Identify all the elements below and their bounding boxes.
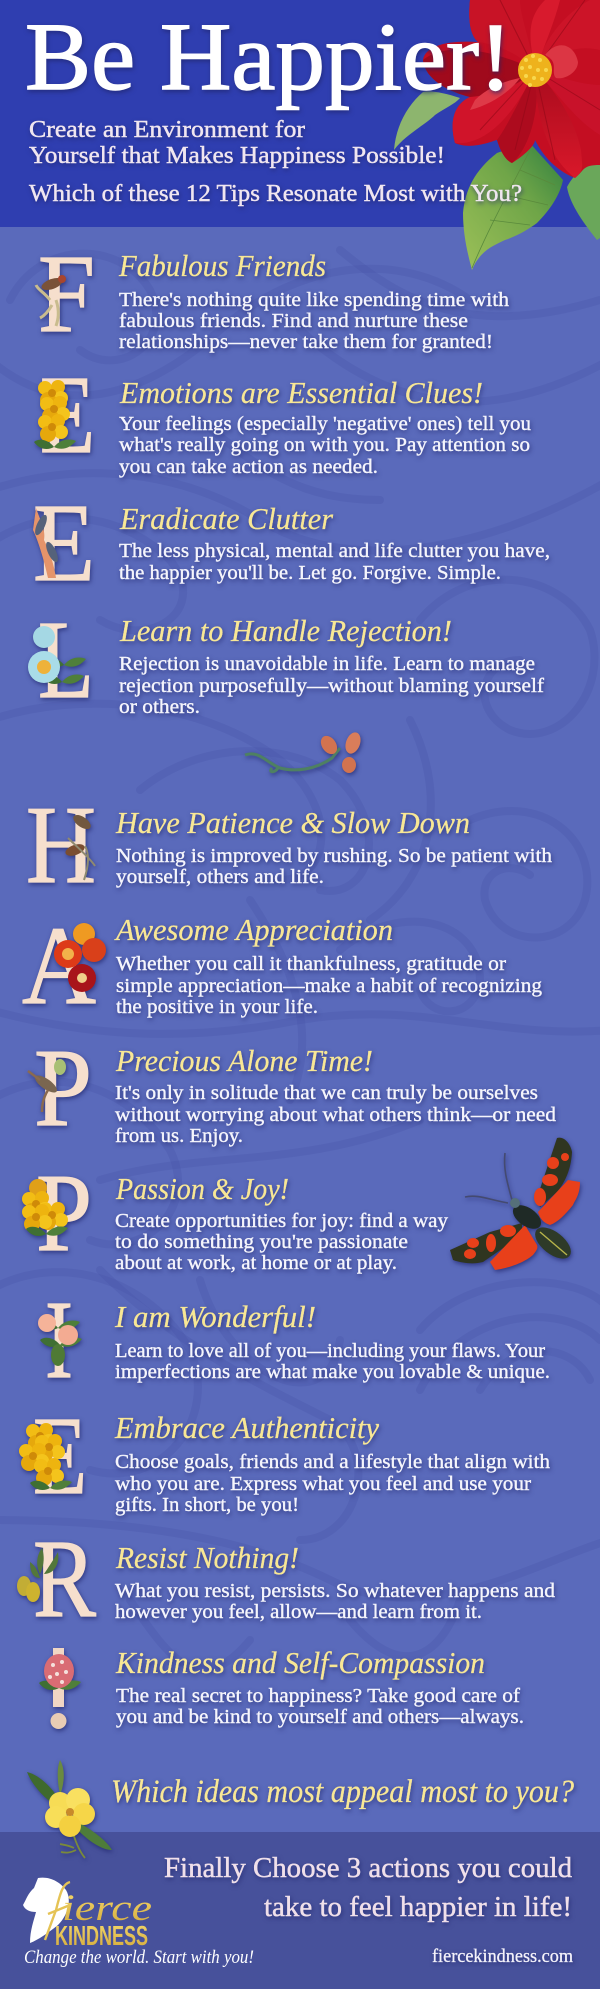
body text: you can take action as needed. [119,456,378,478]
head [510,1198,520,1208]
letter E: E [40,354,95,477]
body text: Learn to love all of you—including your flaws. Your [115,1340,545,1362]
lion head icon [23,1878,69,1943]
abdomen [530,1221,576,1265]
body text [119,289,509,353]
body text [116,845,552,888]
subtitle: Create an Environment for [29,117,305,143]
subtitle: Which of these 12 Tips Resonate Most with You? [29,181,522,207]
subtitle [29,117,522,207]
body text: What you resist, persists. So whatever happens and [115,1580,555,1602]
body text: imperfections are what make you lovable & unique. [115,1361,550,1383]
tip: I am Wonderful! [38,1279,550,1402]
body text [115,1580,555,1623]
panel: footer background [0,1832,600,1989]
title: Be Happier! [25,3,512,110]
heading: Emotions are Essential Clues! [119,375,483,410]
tip: Kindness and Self-Compassion [39,1645,524,1729]
tip: Emotions are Essential Clues! [34,354,531,478]
heading: Kindness and Self-Compassion [115,1645,485,1680]
tip: Precious Alone Time! [28,1027,556,1150]
website url: fiercekindness.com [432,1946,573,1967]
tip: Awesome Appreciation [22,905,542,1028]
flower petals [423,0,600,178]
tip: Passion & Joy! [22,1152,449,1275]
body text: to do something you're passionate [115,1231,408,1253]
body text [116,1685,524,1728]
body text [116,953,542,1018]
background swirl pattern [0,250,600,1670]
letter R: R [33,1518,96,1641]
exclamation mark [39,1648,81,1729]
body text: Rejection is unavoidable in life. Learn to manage [119,653,535,675]
tip: Embrace Authenticity [19,1395,550,1518]
footer call to action: take to feel happier in life! [264,1892,572,1923]
lower wing [450,1223,522,1263]
tip: Resist Nothing! [17,1518,555,1641]
body text: the positive in your life. [116,996,318,1018]
letter F: F [38,233,95,356]
body text [119,653,544,718]
illustration: butterfly [450,1138,580,1270]
body text: about at work, at home or at play. [115,1252,397,1274]
body text: from us. Enjoy. [115,1125,243,1147]
wordmark: ierce [62,1888,152,1929]
heading: Eradicate Clutter [119,501,334,536]
upper wing [537,1138,572,1207]
panel: header background [0,0,600,227]
letter R [17,1518,96,1641]
letter L: L [38,599,94,722]
body text: however you feel, allow—and learn from it. [115,1601,482,1623]
leaf: small left [394,91,460,150]
footer call to action: Finally Choose 3 actions you could [164,1853,572,1884]
letter P: P [34,1027,92,1150]
long f stroke [45,1882,70,1940]
tip: Have Patience & Slow Down [26,784,552,907]
body text: yourself, others and life. [116,866,324,888]
body text: fabulous friends. Find and nurture these [119,310,468,332]
footer call to action [164,1853,572,1923]
body text: you and be kind to yourself and others—always. [116,1706,524,1728]
body text: what's really going on with you. Pay attention so [119,434,530,456]
heading: Fabulous Friends [118,248,326,283]
body text: The less physical, mental and life clutter you have, [119,540,550,562]
body text: Nothing is improved by rushing. So be patient with [116,845,552,867]
tip: Learn to Handle Rejection! [28,599,544,722]
illustration: red dahlia with leaves [394,0,600,270]
body text [115,1451,550,1516]
body text: Create opportunities for joy: find a way [115,1210,449,1232]
heading: I am Wonderful! [114,1299,316,1334]
heading: Have Patience & Slow Down [115,805,470,840]
body text [115,1210,449,1274]
logo: Fierce Kindness: KINDNESS [55,1920,148,1951]
ornament: sprig with buds [245,730,363,773]
body text: Whether you call it thankfulness, gratitude or [116,953,506,975]
heading: Embrace Authenticity [114,1410,379,1445]
body text [115,1082,556,1147]
letter H: H [26,784,96,907]
body text: There's nothing quite like spending time with [119,289,509,311]
body text: The real secret to happiness? Take good care of [116,1685,520,1707]
leaf: big lower [463,143,563,270]
curled petal [545,45,578,78]
body text: simple appreciation—make a habit of recognizing [116,975,542,997]
heading: Precious Alone Time! [115,1043,373,1078]
leaf: right [567,160,600,240]
body text: It's only in solitude that we can truly be ourselves [115,1082,538,1104]
letter A: A [22,905,96,1028]
letter E: E [33,482,95,605]
letter I: I [45,1279,73,1402]
thorax [509,1200,545,1234]
body text [119,540,550,584]
illustration: yellow flower [27,1760,112,1858]
antennae [465,1153,512,1203]
letter P: P [36,1152,92,1275]
body text: the happier you'll be. Let go. Forgive. Simple. [119,562,501,584]
right hindwing [538,1180,580,1225]
tip: Fabulous Friends [36,233,509,356]
body text: or others. [119,696,200,718]
stamen [518,53,552,87]
body text: gifts. In short, be you! [115,1494,299,1516]
heading: Passion & Joy! [115,1171,289,1206]
heading: Learn to Handle Rejection! [119,613,452,648]
logo: Fierce Kindness [23,1878,254,1968]
body text [115,1340,550,1383]
letter E: E [33,1395,87,1518]
letter E [19,1395,87,1518]
body text: relationships—never take them for granted! [119,331,493,353]
body text: without worrying about what others think—or need [115,1104,556,1126]
wing spots [464,1153,569,1259]
body text [119,413,531,478]
body text: Choose goals, friends and a lifestyle that align with [115,1451,550,1473]
subtitle: Yourself that Makes Happiness Possible! [29,143,445,169]
heading: Awesome Appreciation [114,912,393,947]
body text: Your feelings (especially 'negative' ones) tell you [119,413,531,435]
body text: rejection purposefully—without blaming yourself [119,675,544,697]
tagline: Change the world. Start with you! [24,1947,254,1968]
body text: who you are. Express what you feel and use your [115,1473,531,1495]
heading: Resist Nothing! [115,1540,299,1575]
lower hindwing [490,1225,537,1270]
tip: Eradicate Clutter [33,482,550,605]
